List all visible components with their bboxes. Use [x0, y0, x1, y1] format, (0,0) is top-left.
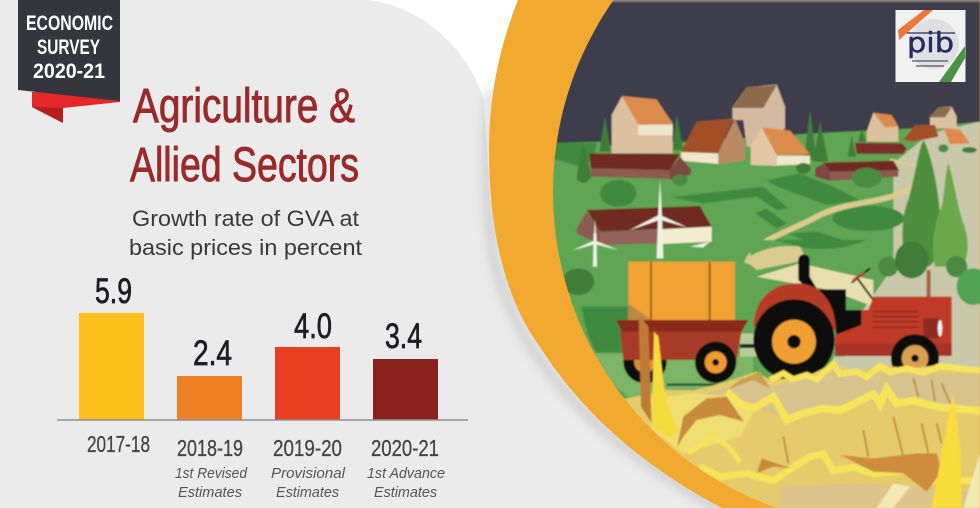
year labels: 2017-18	[87, 431, 150, 457]
title	[130, 80, 359, 192]
estimate notes: Estimates	[276, 484, 339, 501]
logo: PIB	[896, 10, 966, 82]
estimate notes: Estimates	[178, 484, 242, 501]
bar: 2019-20	[275, 347, 340, 420]
wheat field	[620, 315, 980, 508]
tractor and trailer	[562, 240, 980, 508]
icon: windmills	[572, 180, 710, 267]
title: Agriculture &	[133, 80, 355, 133]
bar: 2018-19	[177, 376, 242, 420]
bar values: 2.4	[193, 334, 232, 373]
estimate notes: 1st Revised	[175, 465, 248, 482]
illustration: village and farm scene	[540, 0, 980, 508]
bar values	[95, 272, 422, 373]
badge: Economic Survey 2020-21	[18, 0, 120, 123]
title: Allied Sectors	[130, 139, 359, 192]
tractor	[753, 254, 952, 382]
badge: Economic Survey 2020-21: SURVEY	[37, 36, 100, 59]
badge: Economic Survey 2020-21: ECONOMIC	[26, 12, 113, 35]
year labels: 2018-19	[177, 435, 243, 461]
bar values: 4.0	[294, 307, 332, 346]
bar values: 3.4	[385, 317, 422, 356]
bar chart	[57, 272, 468, 501]
estimate notes	[175, 465, 445, 501]
trailer	[616, 320, 757, 383]
panel: grey background	[0, 0, 725, 508]
subtitle	[129, 206, 362, 260]
hay bale	[628, 262, 735, 321]
orange ring	[489, 0, 980, 508]
year labels: 2019-20	[273, 435, 342, 461]
bar values: 5.9	[95, 272, 132, 311]
village background and houses	[553, 83, 980, 400]
bar: 2020-21	[373, 359, 438, 420]
subtitle: Growth rate of GVA at	[132, 206, 359, 231]
subtitle: basic prices in percent	[129, 235, 362, 260]
logo: PIB: pib	[907, 26, 954, 59]
shadow of orange ring	[487, 90, 725, 508]
badge: Economic Survey 2020-21: 2020-21	[33, 60, 105, 83]
bar: 2017-18	[79, 313, 144, 420]
estimate notes: 1st Advance	[367, 465, 445, 482]
year labels	[87, 431, 439, 461]
estimate notes: Provisional	[271, 465, 346, 482]
estimate notes: Estimates	[374, 484, 437, 501]
year labels: 2020-21	[371, 435, 439, 461]
